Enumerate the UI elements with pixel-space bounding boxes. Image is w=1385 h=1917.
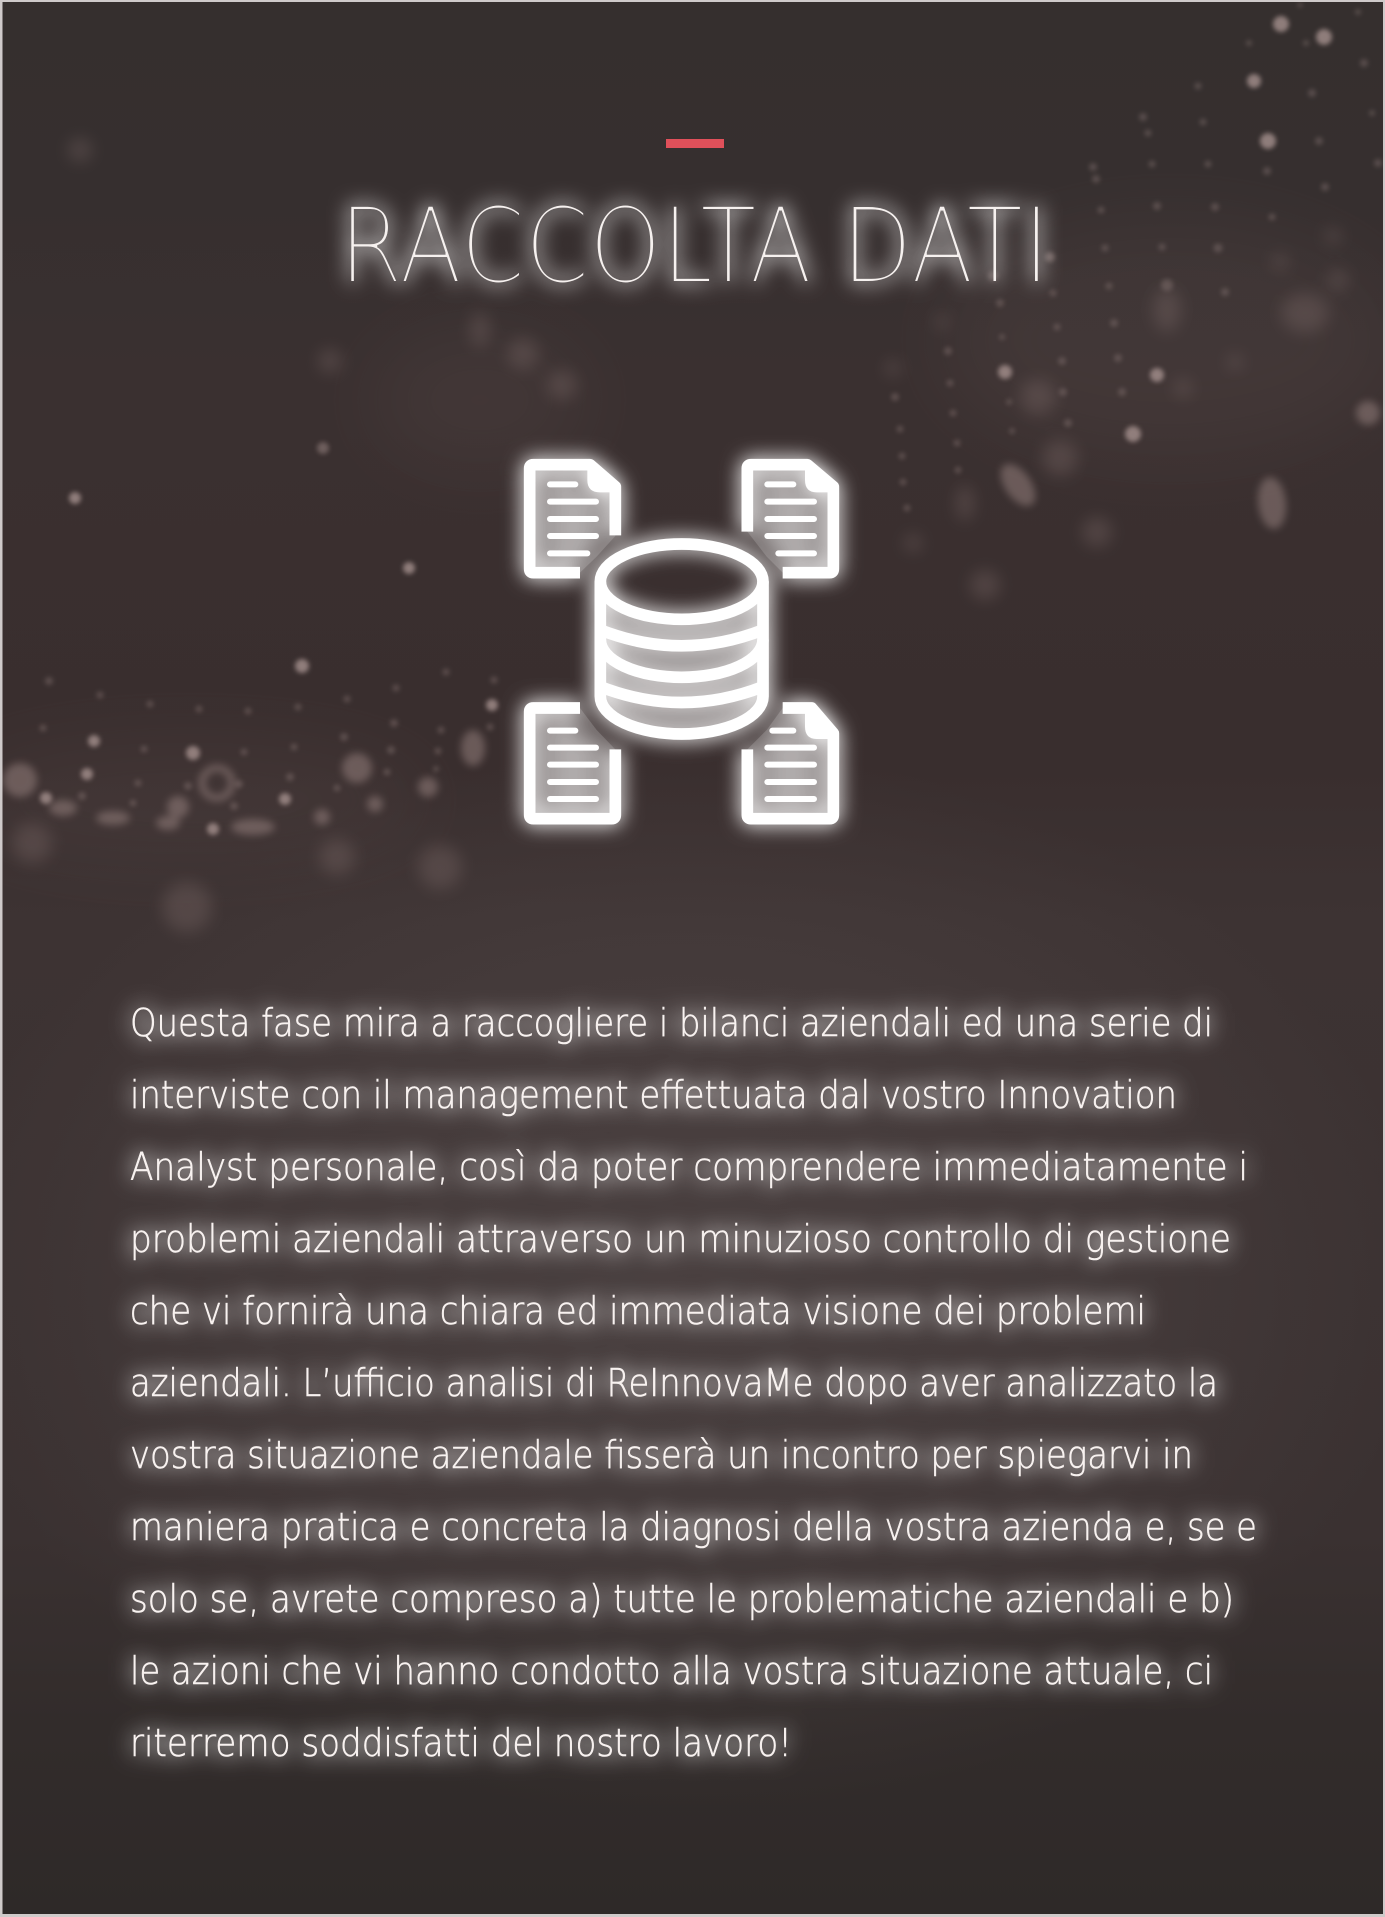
body text: le azioni che vi hanno condotto alla vostra situazione attuale, ci bbox=[130, 1649, 1213, 1694]
icon: database with four documents bbox=[530, 462, 833, 819]
red accent bar bbox=[666, 139, 724, 148]
body text: aziendali. L’ufficio analisi di ReInnovaMe dopo aver analizzato la bbox=[130, 1361, 1218, 1406]
body text: interviste con il management effettuata dal vostro Innovation bbox=[130, 1073, 1177, 1118]
body text: problemi aziendali attraverso un minuzioso controllo di gestione bbox=[130, 1217, 1231, 1262]
body text: Analyst personale, così da poter comprendere immediatamente i bbox=[130, 1145, 1248, 1190]
body text: solo se, avrete compreso a) tutte le problematiche aziendali e b) bbox=[130, 1577, 1234, 1622]
body text: riterremo soddisfatti del nostro lavoro! bbox=[130, 1721, 792, 1766]
background: small particles bbox=[40, 2, 1382, 810]
body text: vostra situazione aziendale fisserà un incontro per spiegarvi in bbox=[130, 1433, 1193, 1478]
background: medium bokeh bbox=[3, 401, 1380, 835]
body text: che vi fornirà una chiara ed immediata visione dei problemi bbox=[130, 1289, 1146, 1334]
body text: maniera pratica e concreta la diagnosi della vostra azienda e, se e bbox=[130, 1505, 1257, 1550]
background: soft light wash bbox=[0, 220, 1385, 860]
icon: database cylinder bbox=[600, 544, 763, 734]
body text bbox=[130, 1001, 1257, 1766]
icon: document bottom right bbox=[747, 705, 833, 819]
icon: document top right bbox=[747, 462, 833, 573]
background: bright bokeh bbox=[40, 16, 1332, 835]
icon: document bottom left bbox=[530, 708, 615, 819]
background: faint large bokeh bbox=[12, 138, 1348, 932]
body text: Questa fase mira a raccogliere i bilanci aziendali ed una serie di bbox=[130, 1001, 1213, 1046]
icon: document top left bbox=[530, 462, 615, 573]
title: RACCOLTA DATI bbox=[339, 185, 1050, 307]
